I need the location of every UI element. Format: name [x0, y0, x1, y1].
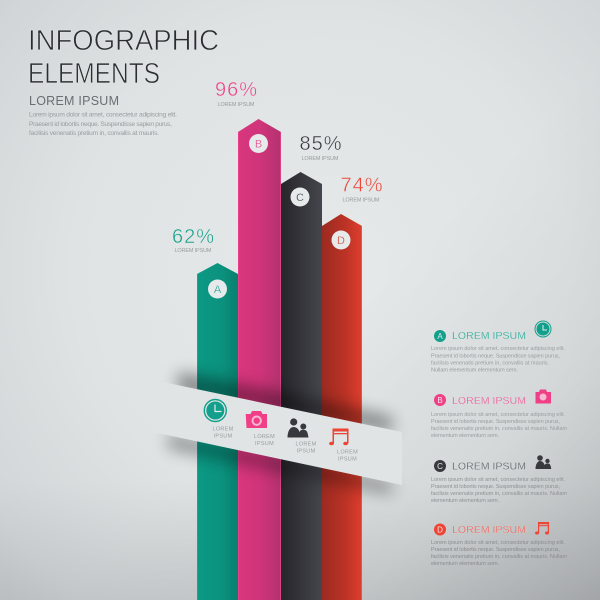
text C: Lorem ipsum dolor sit amet, consectetur adipiscing elit. [431, 477, 565, 483]
band shadows [168, 372, 392, 494]
text B: facilisis venenatis pretium in, convallis at mauris. Nullam [431, 426, 567, 432]
percent label D: 74% [340, 174, 383, 196]
subtitle: LOREM IPSUM [29, 94, 119, 108]
band item: music: IPSUM [338, 456, 357, 462]
text C [431, 477, 567, 504]
badge A: A [437, 332, 443, 341]
panel: item A [431, 321, 565, 374]
title: ELEMENTS [28, 58, 160, 90]
text D [431, 540, 567, 567]
panel: item C [431, 455, 567, 504]
letter badge C [290, 188, 310, 206]
band item: clock [204, 400, 234, 440]
icon: clock [535, 321, 551, 337]
letter badge A: A [214, 284, 222, 296]
percent label A: LOREM IPSUM [174, 248, 212, 254]
text B: elementum elementum sem. [431, 433, 499, 439]
bar D [322, 214, 362, 600]
heading D: LOREM IPSUM [452, 524, 526, 536]
text D: Lorem ipsum dolor sit amet, consectetur adipiscing elit. [431, 540, 565, 546]
bar A [197, 263, 238, 600]
badge D: D [437, 526, 443, 534]
percent label D: LOREM IPSUM [342, 198, 380, 204]
text D: Praesent id lobortis neque. Suspendisse sapien purus, [431, 547, 560, 553]
band item: people [288, 418, 317, 454]
panel: item B [431, 390, 567, 439]
bar C [281, 172, 322, 600]
icon: camera [536, 390, 551, 404]
heading B: LOREM IPSUM [452, 395, 526, 407]
icon: music [535, 522, 549, 534]
band item: camera [246, 411, 275, 447]
text A: Nullam elementum elementum sem. [431, 368, 518, 374]
intro paragraph: Lorem ipsum dolor sit amet, consectetur adipiscing elit. [29, 112, 177, 118]
panel: item D [431, 522, 567, 567]
band item: music [329, 428, 358, 462]
letter badge A [208, 280, 227, 298]
intro paragraph [29, 112, 177, 137]
percent label B: 96% [215, 79, 257, 101]
letter badge B [249, 134, 268, 153]
bar chart [197, 119, 362, 600]
intro paragraph: facilisis venenatis pretium in, convallis at mauris. [29, 130, 159, 137]
percent label C: 85% [300, 133, 342, 155]
title [28, 25, 219, 90]
letter badge D: D [337, 235, 345, 247]
icon: people [536, 455, 551, 469]
band item: clock: IPSUM [214, 434, 233, 440]
bar B [238, 119, 281, 600]
band item: clock: LOREM [212, 426, 234, 432]
band item: music: LOREM [337, 450, 358, 456]
letter badge B: B [255, 138, 262, 150]
text A: facilisis venenatis pretium in, convallis at mauris. [431, 360, 549, 366]
badge B: B [437, 396, 443, 405]
diagonal band [153, 380, 402, 485]
letter badge D [332, 230, 350, 250]
text B: Praesent id lobortis neque. Suspendisse sapien purus, [431, 419, 560, 425]
text B [431, 412, 567, 439]
text A: Praesent id lobortis neque. Suspendisse sapien purus, [431, 354, 560, 360]
title: INFOGRAPHIC [28, 25, 219, 57]
intro paragraph: Praesent id lobortis neque. Suspendisse sapien purus, [29, 121, 172, 128]
text D: facilisis venenatis pretium in, convallis at mauris. Nullam [431, 554, 567, 560]
badge C: C [437, 462, 443, 471]
letter badge C: C [296, 192, 304, 204]
text D: elementum elementum sem. [431, 561, 499, 567]
band item: camera: LOREM [254, 434, 275, 440]
percent label A: 62% [172, 226, 214, 248]
percent label C: LOREM IPSUM [302, 156, 339, 162]
text C: Praesent id lobortis neque. Suspendisse sapien purus, [431, 484, 560, 490]
text A: Lorem ipsum dolor sit amet, consectetur adipiscing elit. [431, 346, 565, 352]
percent label B: LOREM IPSUM [218, 102, 255, 108]
text C: facilisis venenatis pretium in, convallis at mauris. Nullam [431, 491, 567, 497]
band item: people: IPSUM [297, 448, 316, 454]
heading A: LOREM IPSUM [452, 330, 526, 342]
band item: people: LOREM [295, 442, 317, 448]
text B: Lorem ipsum dolor sit amet, consectetur adipiscing elit. [431, 412, 565, 418]
heading C: LOREM IPSUM [452, 460, 526, 472]
text A [431, 346, 565, 374]
text C: elementum elementum sem. [431, 498, 499, 504]
band item: camera: IPSUM [255, 441, 274, 447]
